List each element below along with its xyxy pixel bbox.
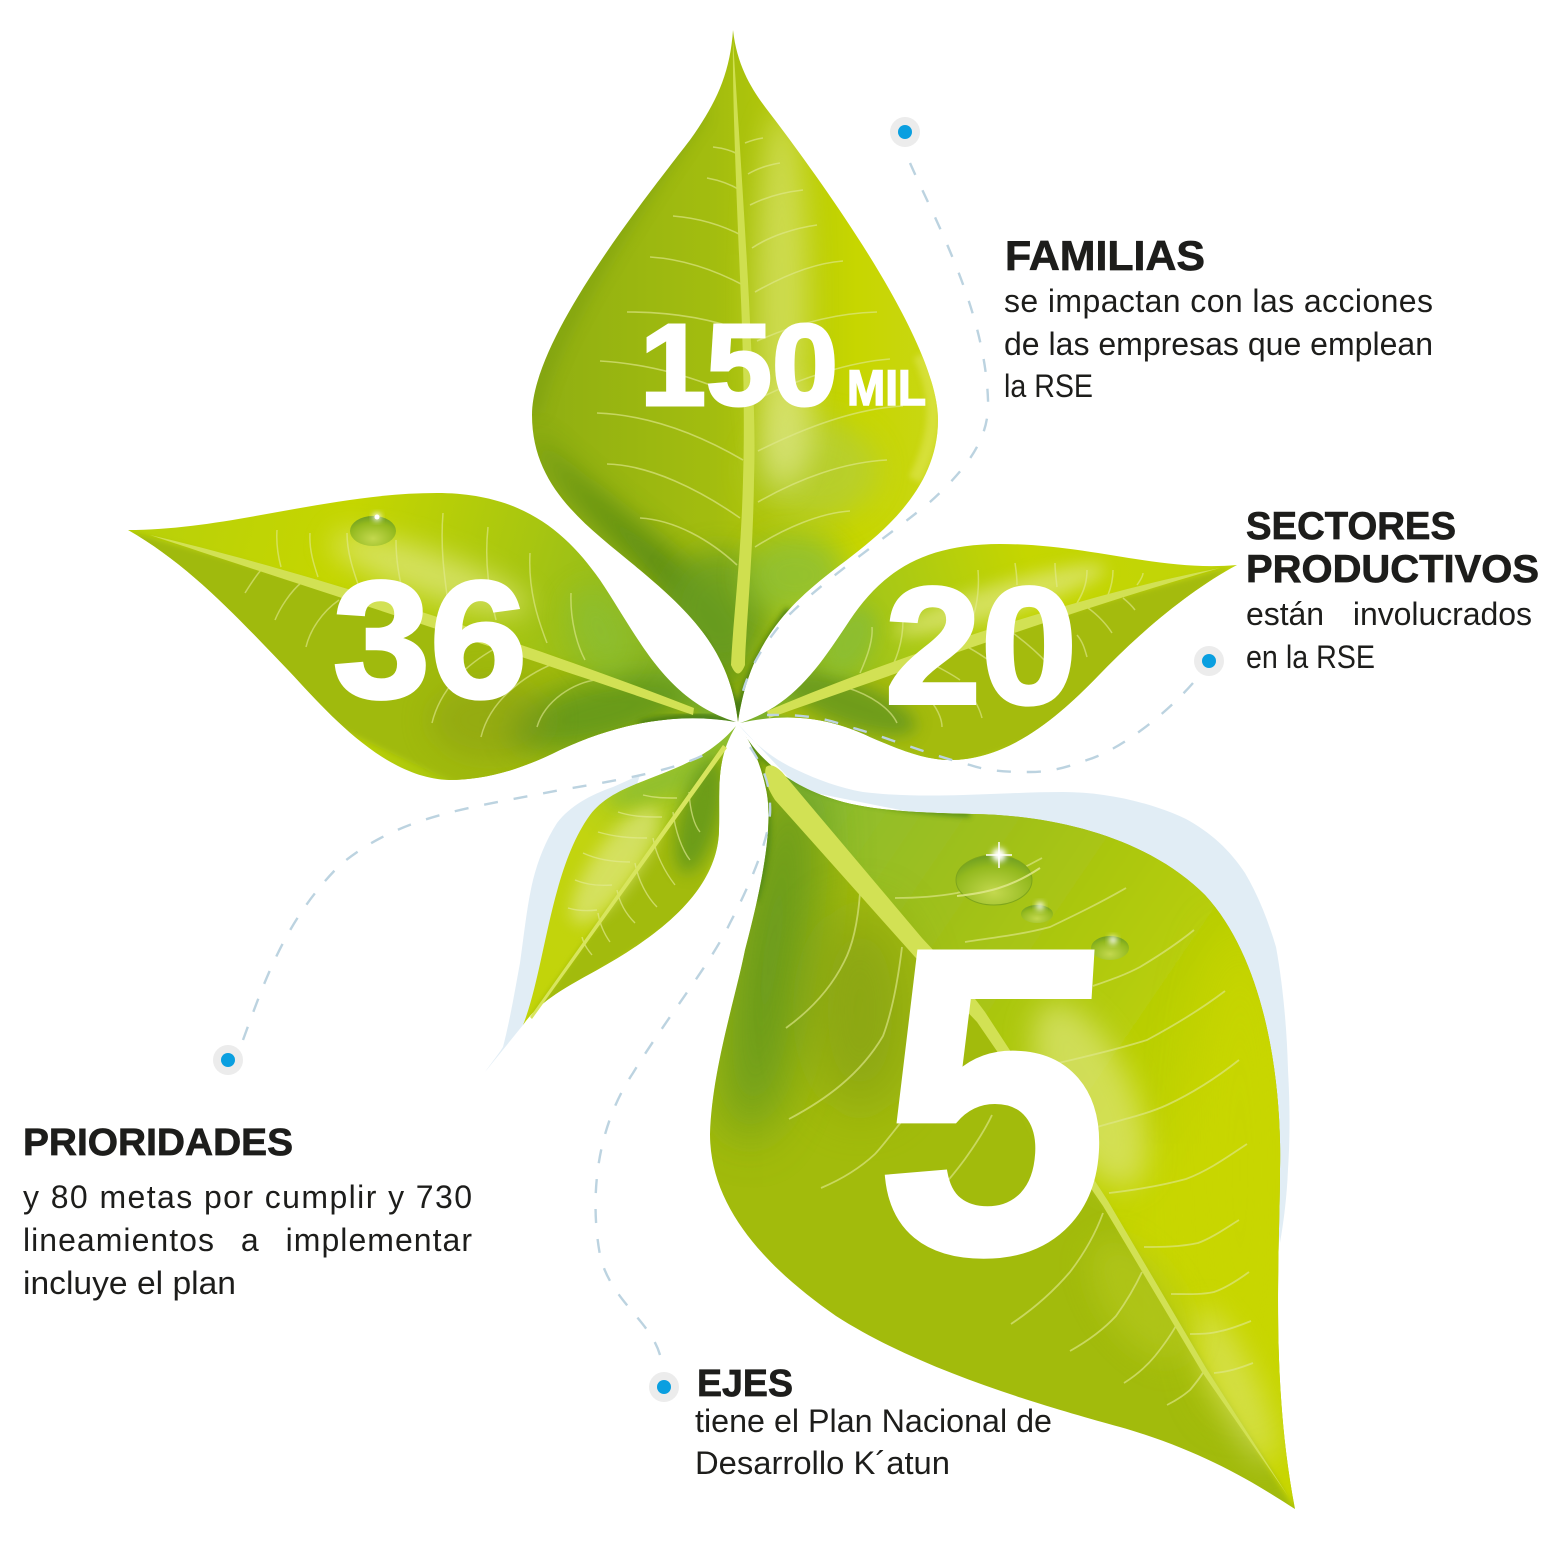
text block: sectores productivos: SECTORES — [1246, 505, 1456, 548]
text block: familias: se impactan con las acciones — [1004, 283, 1433, 319]
left leaf veins — [245, 513, 596, 737]
text block: ejes: Desarrollo K´atun — [695, 1445, 950, 1481]
leaf: right — [735, 540, 1240, 768]
dashed connector: ejes — [596, 740, 770, 1355]
marker: sectores — [1194, 646, 1224, 676]
text block: prioridades: y 80 metas por cumplir y 730 — [23, 1179, 472, 1215]
text block: sectores productivos: están involucrados — [1246, 596, 1532, 632]
big leaf veins — [786, 858, 1253, 1405]
leaf: top — [520, 20, 950, 725]
number: 36: 36 — [333, 548, 527, 733]
text block: familias — [1004, 232, 1433, 404]
number: 20: 20 — [885, 554, 1077, 739]
text block: ejes — [695, 1363, 1052, 1481]
text block: prioridades: incluye el plan — [23, 1265, 236, 1301]
top leaf veins — [597, 138, 903, 565]
text block: ejes: tiene el Plan Nacional de — [695, 1403, 1052, 1439]
text block: prioridades — [23, 1122, 472, 1301]
text block: sectores productivos: PRODUCTIVOS — [1246, 548, 1539, 591]
dashed connector: sectores — [767, 683, 1193, 772]
text block: familias: de las empresas que emplean — [1004, 326, 1433, 362]
water drop on left leaf — [350, 513, 396, 546]
number: 150 mil: 150 — [640, 300, 838, 430]
marker: ejes — [649, 1372, 679, 1402]
leaf: small bottom-left — [515, 725, 740, 1030]
marker: prioridades — [213, 1045, 243, 1075]
light blue shadow: big leaf — [738, 724, 1290, 1243]
small leaf veins — [568, 792, 700, 955]
leaf: left — [120, 485, 745, 790]
number: 5: 5 — [864, 858, 1126, 1345]
big leaf midrib — [765, 765, 1288, 1496]
left leaf midrib — [150, 535, 694, 715]
text block: familias: la RSE — [1004, 368, 1093, 404]
light blue shadow: small leaf — [485, 775, 640, 1072]
dashed connector: prioridades — [243, 750, 713, 1040]
text block: sectores productivos: en la RSE — [1246, 639, 1375, 675]
text block: prioridades: lineamientos a implementar — [23, 1222, 472, 1258]
text block: sectores productivos — [1246, 505, 1539, 675]
text block: familias: FAMILIAS — [1005, 232, 1205, 279]
text block: prioridades: PRIORIDADES — [23, 1122, 293, 1164]
leaf: big bottom-right — [700, 730, 1300, 1515]
marker: familias — [890, 117, 920, 147]
right leaf veins — [848, 563, 1143, 727]
water drops on big leaf — [956, 842, 1129, 960]
dashed connector: familias — [740, 163, 988, 705]
small leaf midrib — [530, 745, 727, 1019]
number: 150 mil: MIL — [847, 360, 926, 416]
number: 150 mil — [640, 300, 926, 430]
right leaf midrib — [767, 568, 1220, 718]
text block: ejes: EJES — [697, 1363, 793, 1405]
top leaf midrib — [731, 40, 755, 674]
